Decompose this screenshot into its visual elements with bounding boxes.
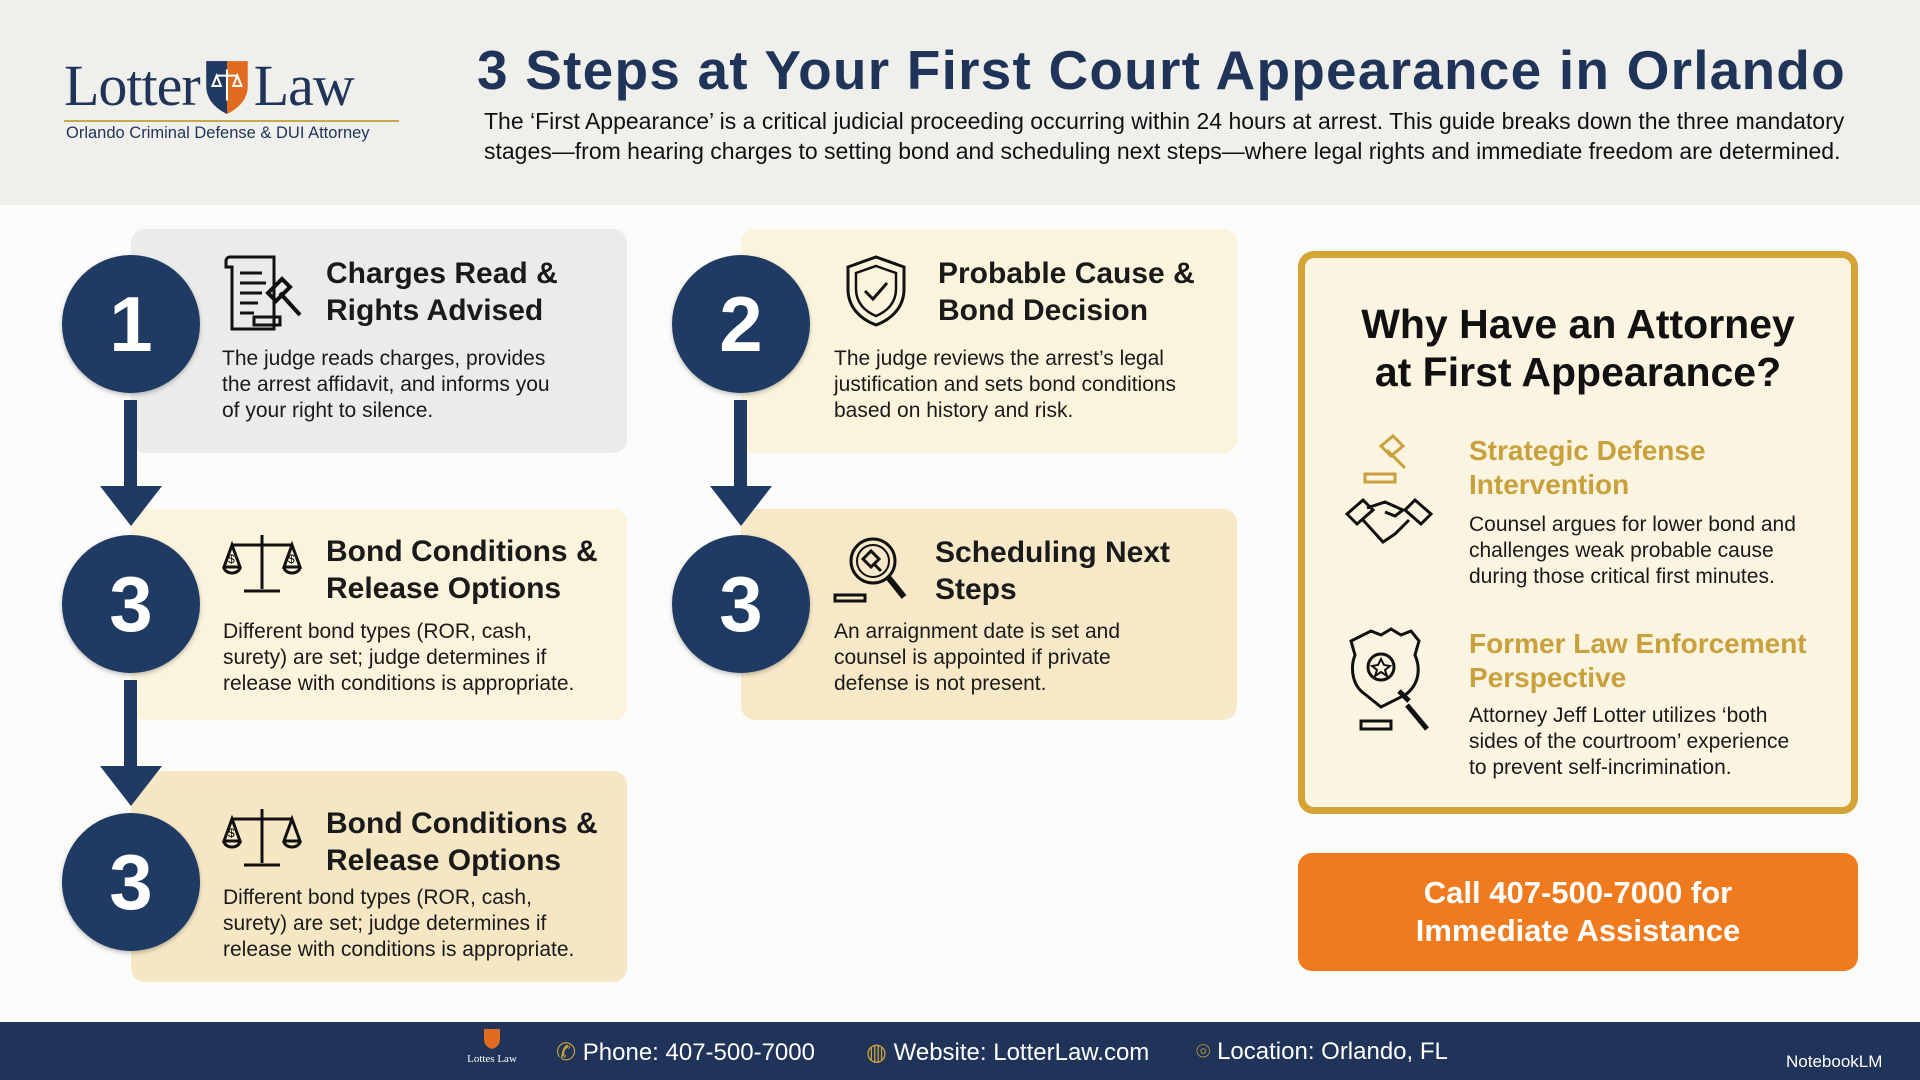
item 1 heading xyxy=(1469,435,1706,500)
icon: magnifier gavel xyxy=(834,538,906,602)
body text: counsel is appointed if private xyxy=(834,646,1111,669)
body text: surety) are set; judge determines if xyxy=(223,912,546,935)
heading: Bond Conditions & xyxy=(326,535,598,568)
footer logo xyxy=(467,1029,517,1065)
item 1 body: during those critical first minutes. xyxy=(1469,565,1775,588)
icon: shield logo xyxy=(206,61,248,114)
logo: Orlando Criminal Defense & DUI Attorney xyxy=(66,124,370,142)
logo xyxy=(64,53,399,142)
panel: step 3 bond conditions xyxy=(131,509,627,720)
item 2 body: to prevent self-incrimination. xyxy=(1469,756,1732,779)
subtitle: The ‘First Appearance’ is a critical judicial proceeding occurring within 24 hours at arrest. This guide breaks down the three mandatory xyxy=(484,108,1844,134)
heading: Charges Read & xyxy=(326,257,558,290)
heading: Bond Conditions & xyxy=(326,807,598,840)
heading: Bond Decision xyxy=(938,294,1148,327)
item 1 heading: Strategic Defense xyxy=(1469,435,1706,466)
heading xyxy=(326,535,598,605)
item 2 heading: Former Law Enforcement xyxy=(1469,628,1807,659)
item 2 body: sides of the courtroom’ experience xyxy=(1469,730,1789,753)
icon: badge gavel xyxy=(1349,627,1429,731)
body text xyxy=(834,620,1120,695)
footer phone: ✆ Phone: 407-500-7000 xyxy=(556,1039,815,1066)
body text: of your right to silence. xyxy=(222,399,433,422)
body text: Different bond types (ROR, cash, xyxy=(223,620,532,643)
title: 3 Steps at Your First Court Appearance in Orlando xyxy=(477,39,1846,101)
arrow: 2 to 3 xyxy=(710,400,772,526)
heading: Why Have an Attorney xyxy=(1361,301,1795,347)
circle: 1 xyxy=(62,255,200,393)
heading xyxy=(935,536,1170,606)
header band xyxy=(0,0,1920,205)
heading xyxy=(1361,301,1795,395)
icon: scales: $ xyxy=(228,826,235,840)
circle: 1: 1 xyxy=(109,280,153,368)
item 2 body: Attorney Jeff Lotter utilizes ‘both xyxy=(1469,704,1767,727)
circle: 3 left: 3 xyxy=(109,560,153,648)
circle: 3 bottom: 3 xyxy=(109,838,153,926)
item 1 body xyxy=(1469,513,1796,588)
body text: the arrest affidavit, and informs you xyxy=(222,373,550,396)
heading xyxy=(326,257,558,327)
heading: Rights Advised xyxy=(326,294,543,327)
circle: 3 right: 3 xyxy=(719,560,763,648)
logo: Lotter xyxy=(64,53,200,118)
footer xyxy=(0,1022,1920,1080)
panel: step 3 bond conditions repeat xyxy=(131,771,627,982)
body text: based on history and risk. xyxy=(834,399,1073,422)
arrow: 1 to 3 xyxy=(100,400,162,526)
CTA button: Immediate Assistance xyxy=(1416,913,1740,948)
body text xyxy=(222,347,550,422)
footer logo: Lottes Law xyxy=(467,1053,517,1065)
circle: 3 bottom xyxy=(62,813,200,951)
item 2 heading: Perspective xyxy=(1469,662,1626,693)
icon: document with gavel xyxy=(224,256,302,330)
body text: justification and sets bond conditions xyxy=(834,373,1176,396)
heading: Steps xyxy=(935,573,1017,606)
CTA button xyxy=(1298,853,1858,971)
circle: 3 left xyxy=(62,535,200,673)
body text xyxy=(223,886,574,961)
body text xyxy=(834,347,1176,422)
body text: release with conditions is appropriate. xyxy=(223,672,574,695)
icon: scales: $ xyxy=(288,552,295,566)
item 2 body xyxy=(1469,704,1789,779)
panel: step 3 scheduling xyxy=(741,509,1237,720)
body text: surety) are set; judge determines if xyxy=(223,646,546,669)
circle: 3 right xyxy=(672,535,810,673)
heading xyxy=(938,257,1195,327)
icon: scales xyxy=(222,535,302,592)
footer location: ⌾ Location: Orlando, FL xyxy=(1196,1038,1448,1065)
notebooklm mark: NotebookLM xyxy=(1786,1052,1882,1071)
body text: Different bond types (ROR, cash, xyxy=(223,886,532,909)
item 1 body: Counsel argues for lower bond and xyxy=(1469,513,1796,536)
logo: Law xyxy=(254,53,354,118)
panel: step 1 xyxy=(131,229,627,453)
item 2 heading xyxy=(1469,628,1807,693)
CTA button: Call 407-500-7000 for xyxy=(1424,875,1732,910)
icon: scales xyxy=(222,809,302,866)
footer website: ◍ Website: LotterLaw.com xyxy=(866,1039,1149,1066)
icon: shield check xyxy=(846,255,906,327)
item 1 body: challenges weak probable cause xyxy=(1469,539,1774,562)
body text: The judge reads charges, provides xyxy=(222,347,545,370)
item 1 heading: Intervention xyxy=(1469,469,1629,500)
body text: defense is not present. xyxy=(834,672,1046,695)
heading: Release Options xyxy=(326,572,561,605)
circle: 2 xyxy=(672,255,810,393)
heading: Scheduling Next xyxy=(935,536,1170,569)
body text: An arraignment date is set and xyxy=(834,620,1120,643)
heading: Probable Cause & xyxy=(938,257,1195,290)
icon: gavel handshake xyxy=(1344,434,1434,544)
heading xyxy=(326,807,598,877)
panel: why attorney xyxy=(1298,251,1858,814)
subtitle xyxy=(484,108,1844,164)
arrow: 3 to 3 xyxy=(100,680,162,806)
panel: step 2 xyxy=(741,229,1237,453)
heading: Release Options xyxy=(326,844,561,877)
circle: 2: 2 xyxy=(719,280,763,368)
body text: release with conditions is appropriate. xyxy=(223,938,574,961)
subtitle: stages—from hearing charges to setting bond and scheduling next steps—where legal rights and immediate freedom are determined. xyxy=(484,138,1840,164)
body text: The judge reviews the arrest’s legal xyxy=(834,347,1164,370)
heading: at First Appearance? xyxy=(1375,349,1781,395)
body text xyxy=(223,620,574,695)
icon: scales: $ xyxy=(228,552,235,566)
